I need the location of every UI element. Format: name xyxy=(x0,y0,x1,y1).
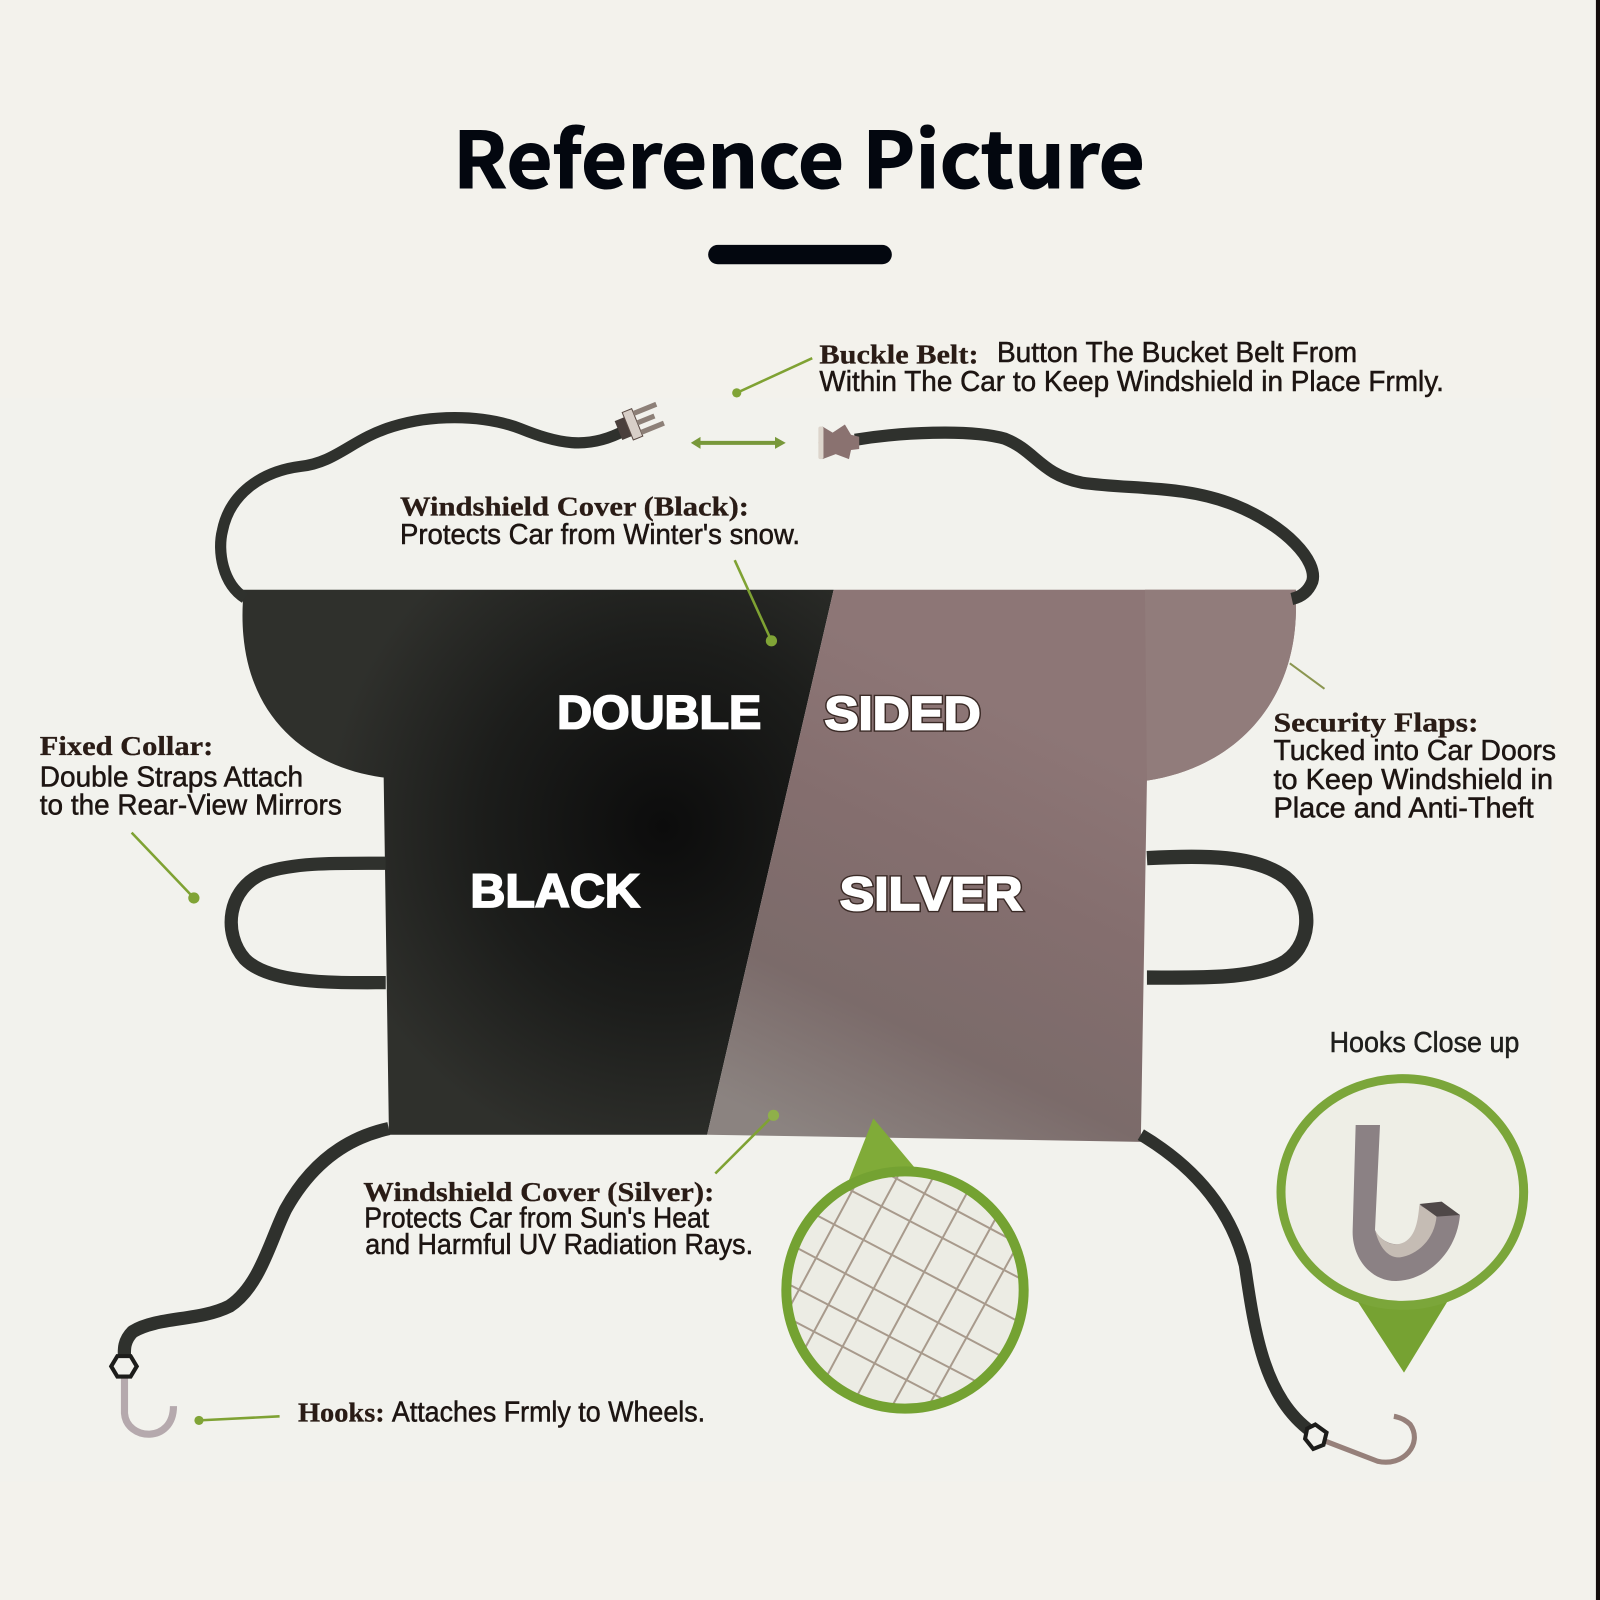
callout: security flaps: Place and Anti-Theft xyxy=(1273,792,1534,824)
black side of cover xyxy=(242,590,834,1135)
BLACK label: BLACK xyxy=(470,865,640,917)
callout: windshield cover silver: Windshield Cover (Silver): xyxy=(363,1176,714,1207)
bottom left strap and hook xyxy=(111,1129,389,1434)
callout: windshield cover silver: and Harmful UV Radiation Rays. xyxy=(365,1229,753,1261)
SILVER label: SILVER xyxy=(840,868,1022,920)
callout: windshield cover black: Windshield Cover (Black): xyxy=(400,490,749,521)
callout: buckle belt: Button The Bucket Belt From xyxy=(997,337,1357,369)
callout: fixed collar: Double Straps Attach xyxy=(40,762,303,794)
top right strap with buckle xyxy=(818,424,1313,599)
icon: mesh close-up bubble xyxy=(781,1118,1029,1414)
callout: windshield cover black xyxy=(400,490,800,646)
title underline xyxy=(708,245,892,264)
SIDED label: SIDED xyxy=(824,688,981,740)
callout: fixed collar: to the Rear-View Mirrors xyxy=(40,789,342,821)
callout: buckle belt: Buckle Belt: xyxy=(819,338,979,369)
callout: security flaps: to Keep Windshield in xyxy=(1273,764,1553,796)
arrow: buckle connection xyxy=(692,438,785,448)
silver side of cover xyxy=(707,590,1296,1142)
callout: security flaps: Security Flaps: xyxy=(1273,707,1479,738)
callout: hooks: Hooks: xyxy=(298,1396,385,1427)
right collar strap xyxy=(1147,857,1306,978)
callout: security flaps xyxy=(1273,663,1556,824)
SILVER label: SILVER xyxy=(840,868,1022,920)
SIDED label: SIDED xyxy=(824,688,981,740)
DOUBLE label: DOUBLE xyxy=(557,687,761,739)
panel: double sided cover xyxy=(242,590,1296,1142)
silver security flap xyxy=(1145,590,1296,781)
callout: windshield cover silver xyxy=(363,1110,779,1261)
callout: windshield cover silver: Protects Car from Sun's Heat xyxy=(364,1203,709,1235)
top left strap with buckle xyxy=(221,400,665,598)
heading: hooks close up: Hooks Close up xyxy=(1330,1027,1519,1059)
bottom right strap and hook xyxy=(1141,1135,1414,1462)
callout: fixed collar xyxy=(40,730,342,904)
callout: buckle belt: Within The Car to Keep Windshield in Place Frmly. xyxy=(819,366,1444,398)
icon: hook close-up bubble xyxy=(1281,1079,1524,1373)
callout: hooks xyxy=(194,1396,705,1428)
left collar strap xyxy=(231,863,386,983)
callout: security flaps: Tucked into Car Doors xyxy=(1273,735,1556,767)
callout: fixed collar: Fixed Collar: xyxy=(40,730,213,761)
callout: hooks: Attaches Frmly to Wheels. xyxy=(392,1396,705,1428)
callout: windshield cover black: Protects Car from Winter's snow. xyxy=(400,519,800,551)
callout: buckle belt xyxy=(732,337,1444,398)
title: Reference Picture xyxy=(453,99,1145,211)
